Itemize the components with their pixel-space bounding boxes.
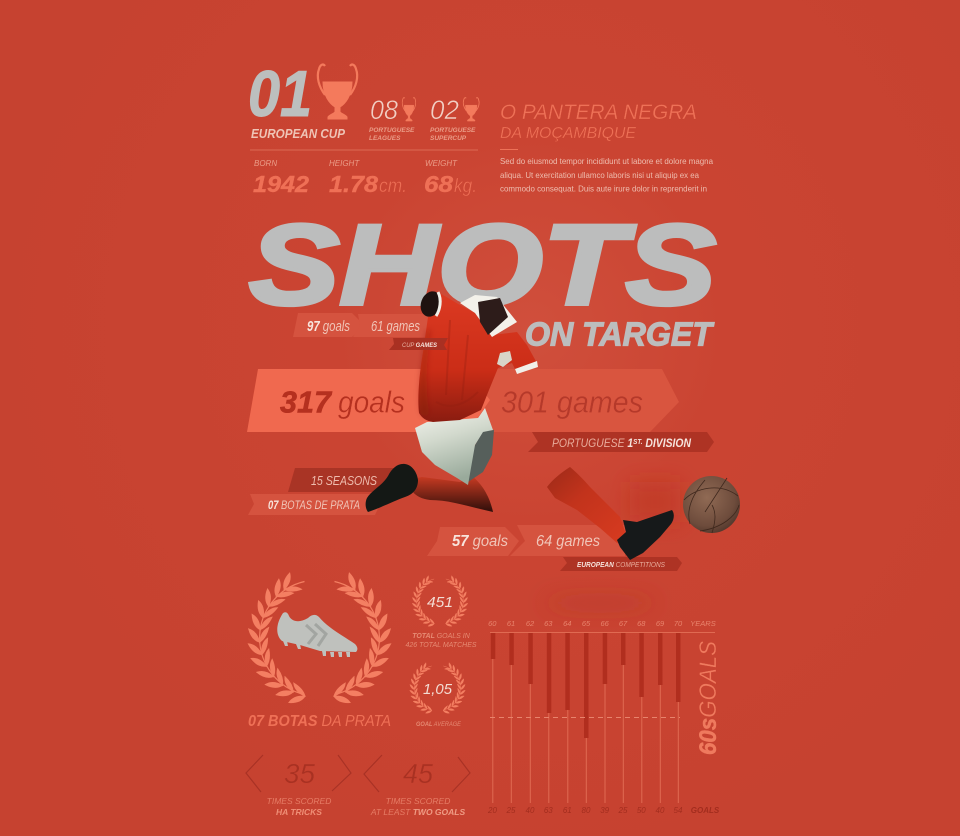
games value: 61 games <box>371 319 420 335</box>
goals arrow <box>427 527 519 556</box>
sleeve opening <box>417 288 445 320</box>
year labels: 61 <box>507 619 515 628</box>
height label: HEIGHT <box>329 159 360 168</box>
panel: goal average <box>410 663 465 728</box>
panel: 60s goals chart <box>487 619 722 815</box>
jersey shading <box>419 330 431 416</box>
sleeve trim <box>436 292 440 316</box>
label: portuguese leagues: PORTUGUESE <box>369 127 415 134</box>
year labels: 66 <box>601 619 610 628</box>
panel: seasons and botas ribbons <box>248 468 397 515</box>
title: shots: SHOTS <box>249 202 716 329</box>
goals arrow <box>293 313 365 337</box>
goal labels: 20 <box>487 806 497 815</box>
value: 35 <box>284 758 315 789</box>
goals word: goals <box>338 384 405 420</box>
label: portuguese supercup: SUPERCUP <box>430 135 467 142</box>
axis <box>490 632 715 633</box>
value: 1,05 <box>423 681 453 698</box>
birth year: 1942 <box>253 171 309 197</box>
seasons ribbon <box>288 468 397 492</box>
goal labels: 63 <box>544 806 553 815</box>
label: european cup: EUROPEAN CUP <box>251 126 345 141</box>
label: PORTUGUESE 1 <box>552 438 634 450</box>
label: portuguese leagues: LEAGUES <box>369 135 401 142</box>
laurel wreath <box>410 663 465 714</box>
number: 02: 02 <box>430 95 459 125</box>
caption: AT LEAST TWO GOALS <box>371 807 465 817</box>
year labels: 63 <box>544 619 553 628</box>
ball <box>683 476 740 533</box>
year labels: 68 <box>637 619 646 628</box>
weight value: 68 <box>424 171 454 197</box>
caption: TOTAL GOALS IN <box>412 633 470 640</box>
weight label: WEIGHT <box>425 159 458 168</box>
chevron left <box>246 755 263 792</box>
caption: 426 TOTAL MATCHES <box>405 642 477 649</box>
paragraph: aliqua. Ut exercitation ullamco laboris nisi ut aliquip ex ea <box>500 170 699 180</box>
jersey <box>418 292 538 422</box>
games arrow <box>510 525 625 556</box>
height value: 1.78 <box>329 171 379 197</box>
botas label: 07 BOTAS DE PRATA <box>268 498 360 512</box>
ribbon <box>389 338 448 350</box>
year labels: 62 <box>526 619 535 628</box>
floor shadow <box>545 598 655 608</box>
caption: TIMES SCORED <box>267 796 331 806</box>
laurel wreath <box>248 573 391 706</box>
subtitle: on target: ON TARGET <box>525 316 715 352</box>
label: portuguese supercup: PORTUGUESE <box>430 127 476 134</box>
year labels: YEARS <box>690 619 716 628</box>
sleeve cuff <box>515 361 538 374</box>
stems <box>493 632 678 803</box>
paragraph: Sed do eiusmod tempor incididunt ut labore et dolore magna <box>500 156 713 166</box>
icon: league trophy <box>402 98 416 121</box>
value: 45 <box>403 758 433 789</box>
goal labels: 80 <box>582 806 591 815</box>
jersey folds <box>436 320 478 406</box>
chevron right <box>452 757 470 792</box>
icon: football boot <box>277 612 357 657</box>
goals arrow <box>247 369 490 432</box>
divider <box>250 150 478 151</box>
panel: trophies and honours <box>248 57 479 142</box>
cup games label ribbon <box>389 338 448 350</box>
goals value: 57 goals <box>452 533 508 550</box>
goals value: 317 <box>280 384 333 420</box>
chevron right <box>332 755 351 791</box>
player kicking leg <box>547 467 674 560</box>
seasons label: 15 SEASONS <box>311 473 377 488</box>
year labels: 60 <box>488 619 497 628</box>
value: 451 <box>427 594 453 611</box>
goal labels: 39 <box>600 806 610 815</box>
panel: biography <box>500 101 713 194</box>
goal labels: GOALS <box>691 806 720 815</box>
panel: player vitals <box>253 159 477 197</box>
panel: two goals <box>364 755 470 817</box>
year labels: 70 <box>674 619 683 628</box>
paragraph: commodo consequat. Duis aute irure dolor in reprenderit in <box>500 184 707 194</box>
height unit: cm. <box>379 176 407 197</box>
goals value: 97 goals <box>307 319 350 335</box>
neck opening <box>478 298 508 335</box>
born: BORN <box>254 159 277 168</box>
short divider <box>500 149 518 150</box>
panel: botas da prata <box>248 573 391 730</box>
goal labels: 50 <box>637 806 646 815</box>
laurel wreath <box>412 576 468 627</box>
label: ST. <box>633 439 643 446</box>
icon: european cup trophy <box>318 65 357 119</box>
heading: O PANTERA NEGRA <box>500 101 697 124</box>
panel: hat tricks <box>246 755 351 817</box>
panel: portuguese first division ribbon <box>247 369 714 452</box>
inner leg <box>468 430 494 482</box>
boot <box>617 510 674 560</box>
goal labels: 25 <box>618 806 628 815</box>
subheading: DA MOÇAMBIQUE <box>500 125 637 142</box>
bars <box>491 633 680 738</box>
goal labels: 25 <box>506 806 516 815</box>
year labels: 65 <box>582 619 591 628</box>
games arrow <box>353 314 435 337</box>
goal labels: 40 <box>656 806 665 815</box>
weight unit: kg. <box>454 176 477 197</box>
chart title: 60sGOALS <box>695 641 722 755</box>
goal labels: 61 <box>563 806 572 815</box>
goal labels: 40 <box>526 806 535 815</box>
panel: cup games ribbon <box>293 313 435 337</box>
label: CUP GAMES <box>402 342 438 349</box>
panel: total goals <box>405 576 477 649</box>
collar <box>460 295 517 337</box>
player upper body and kneeling leg <box>366 288 538 512</box>
year labels: 67 <box>619 619 628 628</box>
shadow behind ball <box>630 482 680 522</box>
icon: supercup trophy <box>463 98 479 121</box>
botas ribbon <box>248 494 385 515</box>
label: EUROPEAN COMPETITIONS <box>577 560 665 569</box>
label: 07 BOTAS DA PRATA <box>248 713 391 730</box>
boot: left leg <box>366 464 418 512</box>
label ribbon <box>528 432 714 452</box>
crest <box>497 351 512 367</box>
chevron left <box>364 755 382 792</box>
number: 08: 08 <box>370 95 398 125</box>
games arrow <box>410 369 679 432</box>
panel: european competitions ribbon <box>427 525 682 571</box>
caption: HA TRICKS <box>276 807 322 817</box>
average line <box>490 716 680 718</box>
year labels: 64 <box>563 619 571 628</box>
goal labels: 54 <box>674 806 683 815</box>
games value: 301 games <box>501 384 643 420</box>
games value: 64 games <box>536 533 600 550</box>
year labels: 69 <box>656 619 665 628</box>
shorts <box>415 408 493 485</box>
sock: left leg <box>413 477 493 512</box>
sock <box>547 467 627 543</box>
caption: GOAL AVERAGE <box>416 721 462 728</box>
caption: TIMES SCORED <box>386 796 450 806</box>
label ribbon <box>560 557 682 571</box>
label: DIVISION <box>643 438 692 450</box>
number: 01 european cup: 01 <box>248 57 312 130</box>
